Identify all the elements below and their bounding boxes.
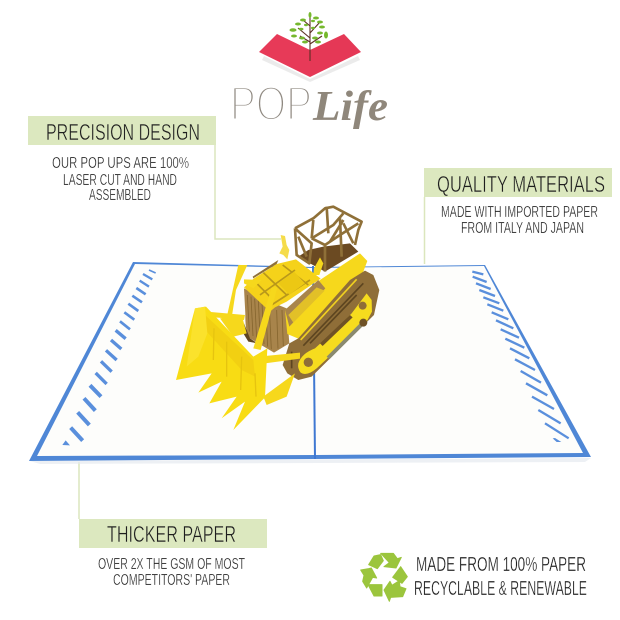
bulldozer blade arms — [207, 265, 300, 405]
description: ASSEMBLED — [89, 187, 151, 204]
panel: thicker paper — [79, 519, 267, 589]
right stripes — [472, 272, 569, 442]
logo red book — [259, 34, 361, 77]
bulldozer corrugation — [247, 295, 283, 349]
bulldozer exhaust — [279, 235, 289, 259]
connector lines — [79, 145, 424, 519]
logo wordmark: Life — [312, 84, 388, 130]
recycling statement — [414, 554, 587, 600]
bulldozer blade — [176, 307, 267, 430]
icon: recycling symbol — [361, 553, 407, 601]
logo tree — [290, 12, 328, 61]
description — [98, 556, 245, 589]
description: OUR POP UPS ARE 100% — [52, 155, 189, 172]
heading: THICKER PAPER — [107, 521, 236, 547]
left stripes — [62, 270, 156, 445]
card centre fold — [313, 266, 315, 459]
panel: open blue card — [29, 262, 591, 464]
panel: precision design — [28, 116, 216, 204]
panel: quality materials — [424, 168, 612, 237]
card shadow — [30, 458, 591, 464]
card white pages — [37, 264, 583, 456]
description — [441, 204, 598, 237]
logo shadow — [262, 56, 360, 82]
description: LASER CUT AND HAND — [63, 172, 177, 189]
bulldozer side panel — [285, 253, 367, 340]
heading: PRECISION DESIGN — [46, 119, 200, 145]
bulldozer top compartments — [244, 259, 321, 312]
heading bar — [424, 168, 612, 197]
heading bar — [28, 116, 216, 145]
description: OVER 2X THE GSM OF MOST — [98, 556, 245, 573]
bulldozer track — [283, 271, 379, 380]
logo wordmark — [230, 78, 388, 131]
bulldozer dark underside — [243, 323, 257, 343]
description — [52, 155, 189, 204]
description: COMPETITORS' PAPER — [113, 572, 230, 589]
bulldozer body side — [244, 288, 289, 353]
logo — [230, 12, 388, 131]
logo wordmark: POP — [230, 78, 312, 131]
bulldozer cab — [295, 207, 362, 272]
illustration: yellow pop-up bulldozer — [176, 207, 379, 430]
card blue edge — [29, 262, 591, 461]
heading bar — [79, 519, 267, 548]
